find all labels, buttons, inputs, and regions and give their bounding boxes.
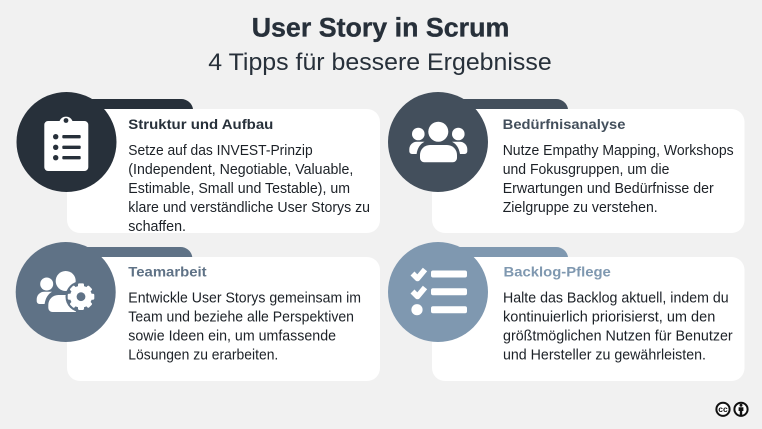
text block: Backlog-Pflege: kontinuierlich priorisierst, um den <box>503 310 715 326</box>
panel: Bedürfnisanalyse <box>388 92 744 233</box>
panel: Backlog-Pflege <box>388 242 744 381</box>
text block: Bedürfnisanalyse: Erwartungen und Bedürfnisse der <box>503 181 714 197</box>
text block: Bedürfnisanalyse: und Fokusgruppen, um die <box>503 162 669 178</box>
title: User Story in Scrum <box>252 12 509 42</box>
icon: Creative Commons CC license <box>716 403 730 416</box>
text block: Backlog-Pflege: Halte das Backlog aktuell, indem du <box>503 291 729 307</box>
icon: Creative Commons BY attribution <box>734 403 748 416</box>
text block: Teamarbeit <box>128 291 361 364</box>
heading: Teamarbeit: Teamarbeit <box>128 263 207 279</box>
text block: Backlog-Pflege: größtmöglichen Nutzen für Benutzer <box>503 329 733 345</box>
heading: Bedürfnisanalyse: Bedürfnisanalyse <box>503 116 626 132</box>
text block: Struktur und Aufbau: Estimable, Small und Testable), um <box>128 181 350 197</box>
text block: Backlog-Pflege: und Hersteller zu gewährleisten. <box>503 348 706 364</box>
text block: Struktur und Aufbau: (Independent, Negotiable, Valuable, <box>128 162 353 178</box>
card: Teamarbeit <box>67 257 380 381</box>
text block: Bedürfnisanalyse: Nutze Empathy Mapping, Workshops <box>503 143 734 159</box>
text block: Bedürfnisanalyse: Zielgruppe zu verstehen. <box>503 200 658 216</box>
tab: Backlog-Pflege <box>438 247 568 257</box>
card: Struktur und Aufbau <box>67 109 380 233</box>
text block: Struktur und Aufbau: Setze auf das INVEST-Prinzip <box>128 143 313 159</box>
icon: Creative Commons CC license: cc <box>718 404 728 414</box>
tab: Bedürfnisanalyse <box>438 99 568 109</box>
text block: Teamarbeit: Lösungen zu erarbeiten. <box>128 348 278 364</box>
panel: Teamarbeit <box>16 242 380 381</box>
text block: Backlog-Pflege <box>503 291 733 364</box>
icon circle: team with gear <box>16 242 116 342</box>
text block: Teamarbeit: Entwickle User Storys gemeinsam im <box>128 291 361 307</box>
heading: Backlog-Pflege: Backlog-Pflege <box>504 264 611 280</box>
icon circle: clipboard <box>16 92 116 192</box>
text block: Teamarbeit: Team und beziehe alle Perspektiven <box>128 310 354 326</box>
heading: Struktur und Aufbau: Struktur und Aufbau <box>128 116 273 132</box>
icon circle: checklist <box>388 242 488 342</box>
tab: Struktur und Aufbau <box>66 99 193 109</box>
card: Bedürfnisanalyse <box>432 109 744 233</box>
card: Backlog-Pflege <box>432 257 744 381</box>
panel: Struktur und Aufbau <box>16 92 380 235</box>
text block: Struktur und Aufbau: klare und verständliche User Storys zu <box>128 200 370 216</box>
icon circle: group of people <box>388 92 488 192</box>
tab: Teamarbeit <box>66 247 192 257</box>
text block: Struktur und Aufbau: schaffen. <box>128 219 186 235</box>
text block: Bedürfnisanalyse <box>503 143 734 216</box>
text block: Struktur und Aufbau <box>128 143 370 235</box>
subtitle: 4 Tipps für bessere Ergebnisse <box>208 49 552 76</box>
text block: Teamarbeit: sowie Ideen ein, um umfassende <box>128 329 336 345</box>
